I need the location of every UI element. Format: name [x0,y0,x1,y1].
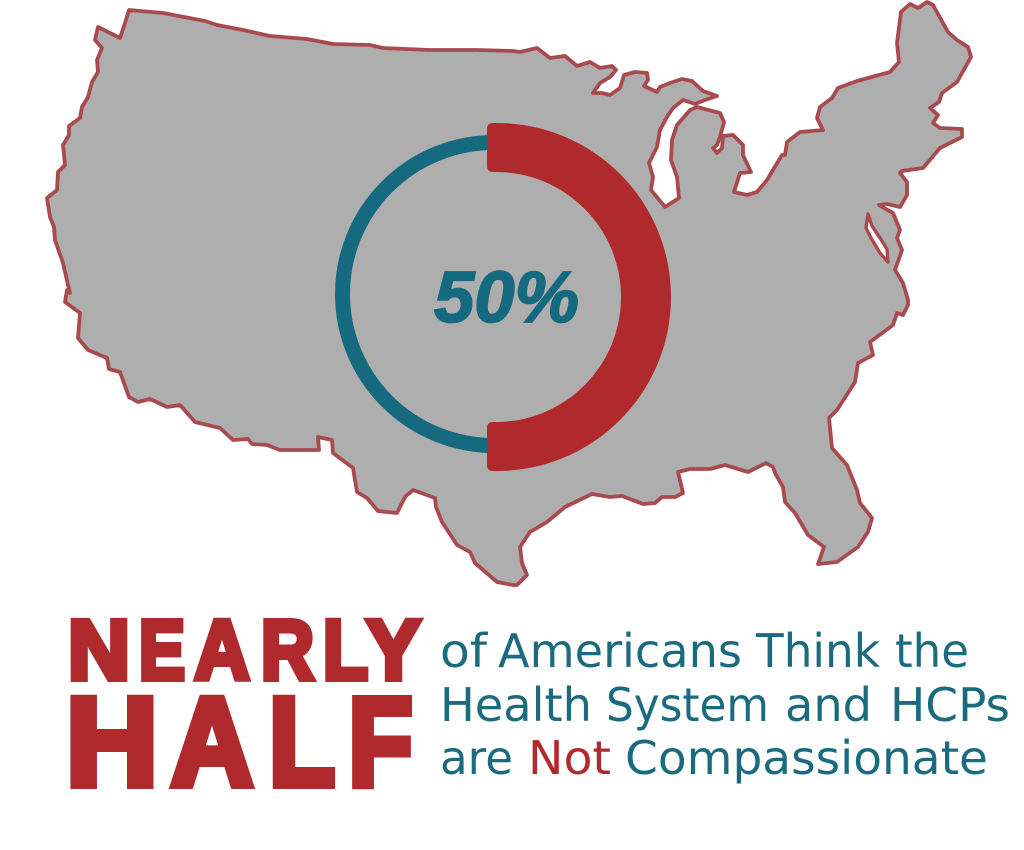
text block: of Americans Think the Health System and HCPs are Not Compassionate: Think [755,624,880,678]
heading letters: NEARLY: A [194,603,250,697]
text block: of Americans Think the Health System and HCPs are Not Compassionate: HCPs [890,678,1010,732]
heading: NEARLY HALF [66,603,420,812]
text block: of Americans Think the Health System and HCPs are Not Compassionate: System [606,678,769,732]
text block: of Americans Think the Health System and HCPs are Not Compassionate: Americans [498,624,742,678]
heading letters: NEARLY: E [139,603,185,697]
heading letters: HALF: H [66,673,158,812]
text block: of Americans Think the Health System and HCPs are Not Compassionate: are [440,731,513,785]
heading letters: NEARLY: N [68,603,130,697]
text block: of Americans Think the Health System and HCPs are Not Compassionate: of [440,624,489,678]
text block: of Americans Think the Health System and HCPs are Not Compassionate: Compassionate [625,731,988,785]
heading letters: HALF: A [171,673,253,812]
heading letters: NEARLY: R [261,603,314,697]
heading letters: NEARLY: L [323,603,368,697]
red 50% arc [487,123,671,471]
heading letters: HALF [66,673,412,812]
text block: of Americans Think the Health System and HCPs are Not Compassionate: and [785,678,872,732]
text block: of Americans Think the Health System and HCPs are Not Compassionate: Health [440,678,592,732]
donut chart: 50% [343,123,671,471]
heading letters: HALF: L [269,673,335,812]
text block: of Americans Think the Health System and HCPs are Not Compassionate: the [895,624,969,678]
text block: of Americans Think the Health System and HCPs are Not Compassionate [440,624,1010,785]
text block: of Americans Think the Health System and HCPs are Not Compassionate: Not [528,731,611,785]
Chesapeake Bay [866,214,888,262]
percentage label: 50% [434,258,579,338]
teal remainder arc [343,142,494,446]
heading letters: HALF: F [348,673,412,812]
heading letters: NEARLY [68,603,420,697]
map of the United States [47,2,971,585]
heading letters: NEARLY: Y [366,603,420,697]
